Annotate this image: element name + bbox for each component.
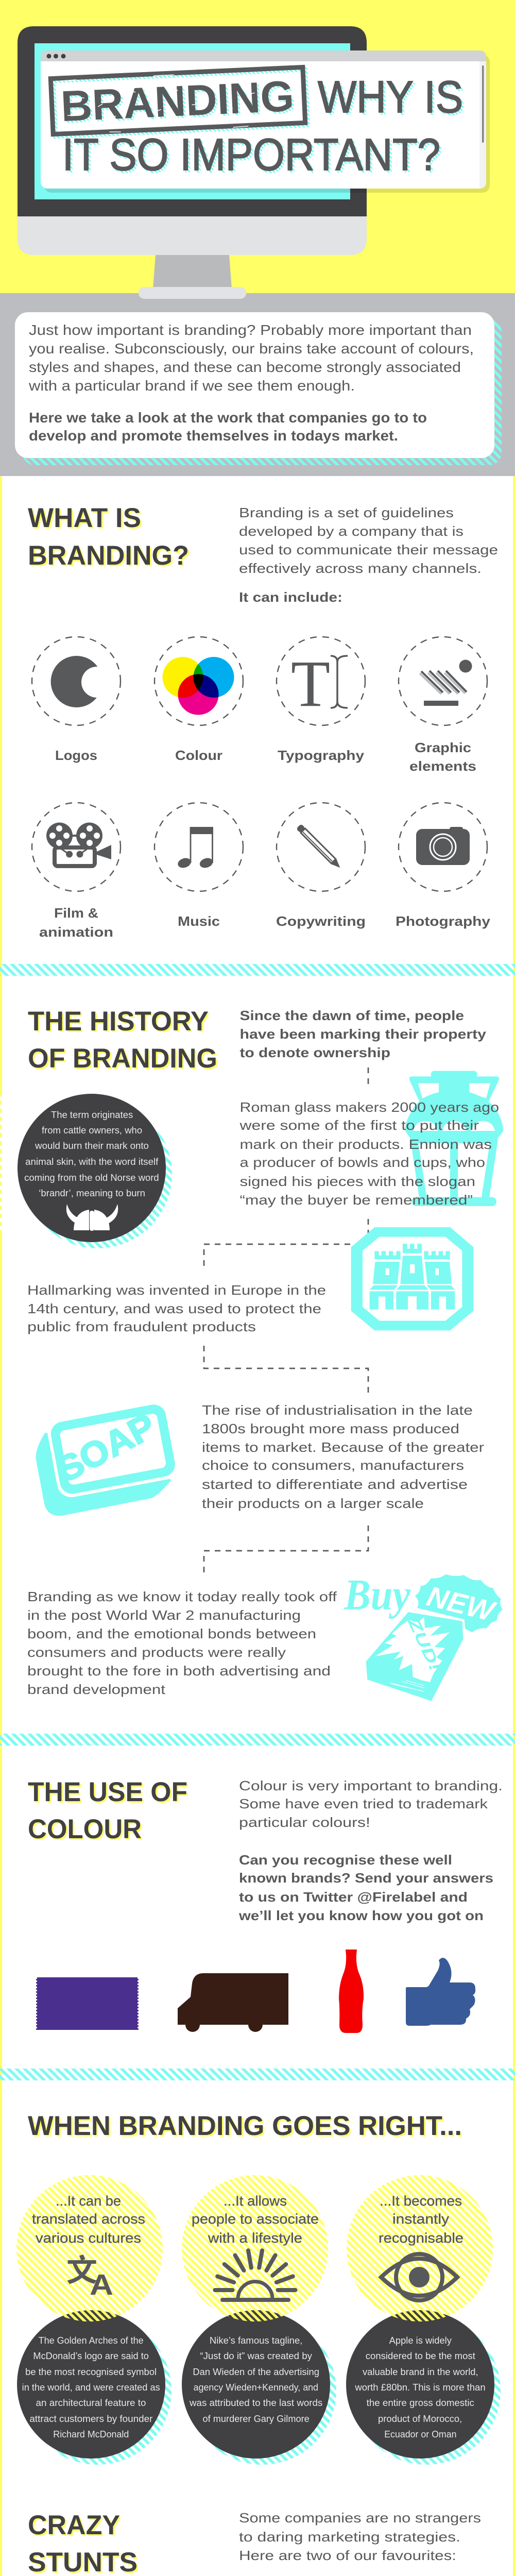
text: daring strategies bbox=[239, 2510, 481, 2563]
heading: the use of colour: COLOUR bbox=[29, 1816, 143, 1846]
callout: origin of the word brand bbox=[18, 1094, 172, 1248]
icon: buy new packet bbox=[344, 1570, 503, 1701]
heading: the history of branding: OF BRANDING bbox=[28, 1043, 217, 1074]
title: it so important: IT SO IMPORTANT? bbox=[62, 130, 440, 180]
text: branding definition: used to communicate their message bbox=[239, 542, 498, 557]
text: dawn of time: to denote ownership bbox=[240, 1045, 390, 1060]
text: dawn of time: Since the dawn of time, people bbox=[240, 1008, 464, 1023]
title: it so important: IT SO IMPORTANT? bbox=[64, 132, 442, 182]
panel: introduction: develop and promote themselves in todays market. bbox=[29, 428, 398, 444]
panel: translated across cultures: an architectural feature to bbox=[36, 2398, 146, 2408]
panel: associate with a lifestyle: of murderer Gary Gilmore bbox=[203, 2414, 310, 2424]
text: colour: Some have even tried to trademark bbox=[239, 1796, 488, 1811]
panel: instantly recognisable: Apple is widely bbox=[389, 2335, 452, 2346]
icon: typography: Typography bbox=[278, 748, 365, 763]
heading: what is branding: WHAT IS bbox=[28, 503, 141, 533]
icon: music bbox=[154, 803, 243, 929]
stripe divider bbox=[0, 964, 515, 976]
panel: associate with a lifestyle: with a lifestyle bbox=[208, 2230, 302, 2246]
icon: logos: Logos bbox=[55, 748, 97, 763]
icon: photography bbox=[396, 803, 491, 929]
text: colour: to us on Twitter @Firelabel and bbox=[239, 1889, 468, 1905]
stripe divider bbox=[0, 1734, 515, 1745]
icon: film and animation: animation bbox=[39, 924, 113, 940]
panel: associate with a lifestyle: people to associate bbox=[192, 2211, 319, 2227]
text: roman glass makers: mark on their products. Ennion was bbox=[240, 1137, 492, 1152]
text: post war branding: consumers and products were really bbox=[27, 1645, 286, 1660]
callout: origin of the word brand: ‘brandr’, meaning to burn bbox=[39, 1188, 145, 1198]
panel: associate with a lifestyle: Dan Wieden of the advertising bbox=[193, 2367, 319, 2377]
text: branding definition: It can include: bbox=[239, 589, 342, 605]
icon: typography: T bbox=[291, 647, 330, 720]
icon: graphic elements bbox=[399, 637, 487, 774]
icon: blue thumbs up bbox=[406, 1958, 475, 2026]
text: roman glass makers: were some of the first to put their bbox=[239, 1117, 479, 1133]
heading: the history of branding: THE HISTORY bbox=[29, 1008, 210, 1038]
panel: instantly recognisable: ...It becomes bbox=[380, 2193, 462, 2209]
title: why is: WHY IS bbox=[320, 74, 465, 124]
text: daring strategies: Some companies are no strangers bbox=[239, 2510, 481, 2526]
heading: crazy stunts: CRAZY bbox=[29, 2512, 122, 2542]
text: post war branding: brand development bbox=[27, 1682, 166, 1697]
hero background bbox=[0, 0, 515, 476]
stripe divider bbox=[0, 2069, 515, 2080]
heading: what is branding: WHAT IS bbox=[29, 504, 143, 535]
panel: instantly recognisable: instantly bbox=[392, 2211, 450, 2227]
callout: origin of the word brand: animal skin, with the word itself bbox=[25, 1157, 159, 1167]
icon: translate: 文 bbox=[66, 2246, 97, 2291]
panel: introduction: styles and shapes, and these can become strongly associated bbox=[29, 359, 461, 375]
panel: translated across cultures: translated across bbox=[32, 2211, 145, 2227]
heading: crazy stunts: CRAZY bbox=[28, 2510, 120, 2540]
icon: roman urn bbox=[405, 1071, 503, 1206]
icon: sunrise bbox=[215, 2250, 296, 2300]
text: branding definition: effectively across many channels. bbox=[239, 561, 482, 576]
title stamp: branding: BRANDING bbox=[60, 72, 295, 130]
icon: red bottle bbox=[339, 1950, 364, 2033]
panel: translated across cultures: attract customers by founder bbox=[29, 2414, 152, 2424]
heading: crazy stunts bbox=[28, 2510, 139, 2576]
callout: origin of the word brand: coming from the old Norse word bbox=[24, 1173, 159, 1183]
panel: translated across cultures: Richard McDonald bbox=[53, 2429, 129, 2439]
heading: the history of branding bbox=[28, 1006, 219, 1075]
icon: brown delivery truck bbox=[178, 1973, 288, 2032]
text: industrialisation: their products on a larger scale bbox=[202, 1496, 424, 1511]
text: colour bbox=[238, 1778, 503, 1923]
text: dawn of time: have been marking their property bbox=[240, 1026, 487, 1042]
callout: origin of the word brand: from cattle owners, who bbox=[42, 1125, 142, 1136]
connector bbox=[368, 1067, 369, 1086]
panel: instantly recognisable: worth £80bn. This is more than bbox=[354, 2382, 486, 2393]
icon: colour bbox=[154, 637, 243, 763]
icon: eye bbox=[381, 2254, 457, 2300]
icon: graphic elements: elements bbox=[409, 758, 476, 774]
icon: music: Music bbox=[178, 913, 220, 929]
text: industrialisation: The rise of industrialisation in the late bbox=[202, 1402, 473, 1418]
panel: associate with a lifestyle: Nike’s famous tagline, bbox=[210, 2335, 302, 2346]
text: roman glass makers bbox=[239, 1099, 499, 1208]
text: hallmarking: public from fraudulent products bbox=[27, 1319, 256, 1334]
panel: introduction: you realise. Subconsciously, our brains take account of colours, bbox=[29, 341, 474, 357]
panel: introduction: Here we take a look at the work that companies go to to bbox=[29, 410, 427, 426]
text: hallmarking bbox=[27, 1282, 326, 1334]
panel: associate with a lifestyle: was attributed to the last words bbox=[189, 2398, 322, 2408]
text: hallmarking: 14th century, and was used to protect the bbox=[27, 1301, 321, 1316]
panel: instantly recognisable: considered to be the most bbox=[366, 2351, 475, 2361]
panel: associate with a lifestyle bbox=[182, 2175, 336, 2465]
text: roman glass makers: “may the buyer be remembered” bbox=[240, 1192, 473, 1208]
heading: what is branding: BRANDING? bbox=[28, 540, 189, 571]
panel: translated across cultures: be the most recognised symbol bbox=[25, 2367, 157, 2377]
panel: associate with a lifestyle: “Just do it” was created by bbox=[200, 2351, 312, 2361]
panel: translated across cultures: various cultures bbox=[36, 2230, 141, 2246]
title: why is: WHY IS bbox=[318, 72, 463, 122]
connector bbox=[204, 1526, 368, 1574]
panel: associate with a lifestyle: ...It allows bbox=[224, 2193, 287, 2209]
heading: when branding goes right: WHEN BRANDING GOES RIGHT... bbox=[29, 2112, 464, 2143]
text: industrialisation: choice to consumers, manufacturers bbox=[202, 1458, 464, 1473]
heading: when branding goes right: WHEN BRANDING GOES RIGHT... bbox=[28, 2111, 462, 2141]
text: roman glass makers: a producer of bowls and cups, who bbox=[240, 1155, 485, 1170]
text: branding definition: developed by a company that is bbox=[239, 523, 464, 539]
text: hallmarking: Hallmarking was invented in Europe in the bbox=[27, 1282, 326, 1298]
text: roman glass makers: signed his pieces with the slogan bbox=[240, 1174, 475, 1189]
heading: the history of branding: THE HISTORY bbox=[28, 1006, 209, 1037]
icon: soap bar bbox=[36, 1399, 181, 1516]
icon: film and animation bbox=[32, 803, 121, 940]
icon: translate bbox=[66, 2246, 113, 2301]
icon: hallmark castle bbox=[351, 1227, 473, 1330]
icon: copywriting: Copywriting bbox=[276, 913, 366, 929]
panel: translated across cultures: McDonald’s logo are said to bbox=[33, 2351, 149, 2361]
heading: what is branding bbox=[28, 503, 191, 572]
icon: translate: A bbox=[90, 2268, 113, 2301]
panel: instantly recognisable: the entire gross domestic bbox=[367, 2398, 474, 2408]
text: branding definition: Branding is a set of guidelines bbox=[239, 505, 454, 520]
panel: translated across cultures bbox=[16, 2175, 171, 2465]
text: post war branding: in the post World War 2 manufacturing bbox=[27, 1607, 301, 1623]
text: daring strategies: to daring marketing strategies. bbox=[239, 2529, 460, 2545]
panel: instantly recognisable: Ecuador or Oman bbox=[384, 2429, 456, 2439]
icon: buy new packet: ZUD! bbox=[404, 1615, 444, 1674]
text: daring strategies: Here are two of our favourites: bbox=[239, 2548, 456, 2563]
panel: introduction: Just how important is branding? Probably more important than bbox=[29, 322, 472, 338]
panel: introduction bbox=[15, 312, 502, 465]
text: post war branding bbox=[27, 1589, 337, 1697]
text: colour: Colour is very important to branding. bbox=[239, 1778, 503, 1793]
panel: introduction: with a particular brand if we see them enough. bbox=[28, 378, 355, 394]
text: industrialisation: started to differentiate and advertise bbox=[202, 1477, 468, 1492]
callout: origin of the word brand: The term originates bbox=[51, 1110, 133, 1120]
text: colour: known brands? Send your answers bbox=[239, 1870, 493, 1886]
icon: film and animation: Film & bbox=[54, 905, 98, 921]
text: dawn of time bbox=[240, 1008, 487, 1060]
icon: copywriting bbox=[276, 803, 366, 929]
text: industrialisation: items to market. Because of the greater bbox=[202, 1439, 484, 1455]
panel: associate with a lifestyle: agency Wieden+Kennedy, and bbox=[194, 2382, 318, 2393]
panel: translated across cultures: The Golden Arches of the bbox=[39, 2335, 144, 2346]
panel: instantly recognisable: recognisable bbox=[379, 2230, 464, 2246]
text: colour: we’ll let you know how you got on bbox=[238, 1908, 484, 1923]
panel: translated across cultures: ...It can be bbox=[56, 2193, 121, 2209]
icon: buy new packet: NEW bbox=[424, 1580, 500, 1628]
text: branding definition bbox=[239, 505, 498, 605]
connector bbox=[204, 1219, 368, 1267]
icon: viking helmet bbox=[66, 1204, 118, 1231]
text: post war branding: brought to the fore in both advertising and bbox=[27, 1663, 331, 1679]
icon: buy new packet: Buy bbox=[344, 1570, 410, 1619]
title stamp: branding: BRANDING bbox=[62, 74, 297, 132]
panel: instantly recognisable bbox=[346, 2175, 501, 2465]
text: post war branding: boom, and the emotional bonds between bbox=[27, 1626, 316, 1641]
heading: the history of branding: OF BRANDING bbox=[29, 1045, 219, 1075]
text: industrialisation: 1800s brought more mass produced bbox=[202, 1421, 459, 1436]
text: colour: particular colours! bbox=[239, 1815, 370, 1830]
icon: purple chocolate bar bbox=[36, 1977, 139, 2030]
text: colour: Can you recognise these well bbox=[239, 1852, 452, 1868]
heading: what is branding: BRANDING? bbox=[29, 542, 191, 572]
panel: instantly recognisable: product of Morocco, bbox=[378, 2414, 462, 2424]
text: roman glass makers: Roman glass makers 2000 years ago bbox=[240, 1099, 499, 1115]
icon: photography: Photography bbox=[396, 913, 491, 929]
text: post war branding: Branding as we know it today really took off bbox=[27, 1589, 337, 1604]
icon: soap bar: SOAP bbox=[51, 1406, 162, 1490]
heading: the use of colour: THE USE OF bbox=[28, 1777, 187, 1807]
heading: the use of colour: COLOUR bbox=[28, 1814, 142, 1844]
browser window with title bbox=[41, 50, 490, 193]
heading: the use of colour bbox=[28, 1777, 189, 1846]
icon: typography bbox=[277, 637, 365, 763]
text: industrialisation bbox=[202, 1402, 484, 1511]
heading: the use of colour: THE USE OF bbox=[29, 1778, 189, 1809]
connector bbox=[204, 1346, 368, 1393]
icon: desktop monitor bbox=[18, 26, 367, 299]
icon: graphic elements: Graphic bbox=[415, 740, 471, 755]
callout: origin of the word brand: would burn their mark onto bbox=[35, 1141, 149, 1151]
panel: instantly recognisable: valuable brand in the world, bbox=[363, 2367, 478, 2377]
icon: colour: Colour bbox=[175, 748, 222, 763]
panel: translated across cultures: in the world, and were created as bbox=[22, 2382, 160, 2393]
icon: logos bbox=[32, 637, 121, 763]
